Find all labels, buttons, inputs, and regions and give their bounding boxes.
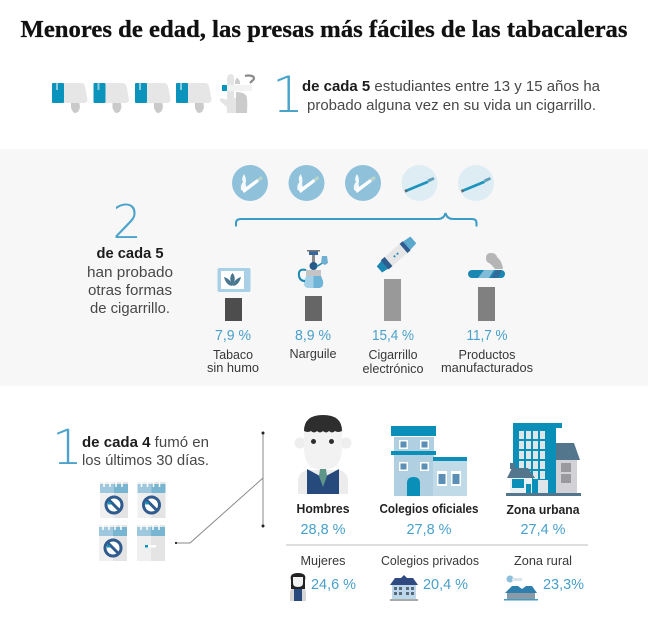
icon: e-cigarette [375, 235, 417, 274]
stat: 1 in 4: los últimos 30 días. [82, 452, 209, 469]
values and labels: Productos [458, 348, 516, 362]
values and labels: sin humo [207, 361, 259, 375]
icons: five circles, three cigarettes and two e-cigarettes [232, 165, 494, 201]
stat: 2 in 5: han probado [87, 264, 173, 281]
connector lines [175, 432, 264, 544]
pictogram: four calendars [99, 482, 166, 561]
bar: hookah [305, 296, 322, 321]
top row labels and values: Colegios oficiales [380, 502, 479, 516]
stat: 2 in 5: otras formas [88, 282, 172, 299]
stat: 1 in 5 students: 1 [272, 66, 304, 124]
values and labels: Cigarrillo [368, 348, 418, 362]
bottom row labels [300, 554, 572, 568]
icon: woman [290, 573, 306, 601]
values and labels: Tabaco [213, 348, 253, 362]
icon: manufactured products [468, 253, 505, 278]
pictogram: four no-smoking thumbs and one smoking hand [52, 74, 254, 113]
stat: 1 in 4: de cada 4 fumó en [82, 434, 209, 451]
values and labels: Narguile [290, 347, 337, 361]
bar: smokeless tobacco [225, 298, 242, 321]
icon: man [294, 415, 352, 494]
stat: 1 in 5 students: de cada 5 estudiantes entre 13 y 15 años ha [302, 78, 601, 95]
stat: 2 in 5 [87, 195, 173, 317]
stat: 2 in 5: de cigarrillo. [90, 300, 170, 317]
top row labels and values: 28,8 % [300, 521, 346, 538]
value: private schools: 20,4 % [423, 576, 468, 593]
stat: 2 in 5: de cada 5 [96, 245, 164, 262]
stat: 1 in 4: 1 [52, 420, 83, 476]
icon: private school [390, 575, 418, 601]
divider [286, 544, 588, 546]
values and labels: 11,7 % [466, 327, 508, 344]
values and labels: electrónico [362, 362, 424, 376]
icon: hookah [299, 250, 328, 288]
stat: 1 in 5 students: probado alguna vez en su vida un cigarrillo. [307, 97, 596, 114]
values and labels: 8,9 % [295, 327, 331, 344]
bottom row labels: Colegios privados [381, 554, 479, 568]
bottom row labels: Mujeres [300, 554, 346, 568]
top row labels and values: Zona urbana [506, 503, 581, 517]
values and labels: 15,4 % [372, 327, 414, 344]
title: Menores de edad, las presas más fáciles de las tabacaleras [20, 17, 628, 43]
panel: other forms of cigarette [0, 149, 648, 386]
bar: e-cigarette [384, 279, 401, 321]
bottom row labels: Zona rural [514, 554, 572, 568]
stat: 1 in 4 [52, 420, 209, 476]
stat: 2 in 5: 2 [112, 195, 142, 249]
icon: smokeless tobacco [218, 268, 250, 292]
icon: rural zone [504, 576, 538, 600]
top row labels and values: 27,8 % [406, 521, 452, 538]
value: rural zone: 23,3% [543, 576, 584, 593]
values and labels [207, 327, 533, 376]
icon: urban zone [506, 423, 581, 496]
value: women: 24,6 % [311, 576, 356, 593]
icon: public school [391, 426, 467, 496]
top row labels and values: Hombres [296, 502, 350, 516]
values and labels: manufacturados [441, 361, 533, 375]
brace [236, 213, 476, 226]
bar: manufactured products [478, 287, 495, 321]
top row labels and values [296, 502, 581, 538]
top row labels and values: 27,4 % [520, 521, 566, 538]
stat: 1 in 5 students [272, 66, 601, 124]
values and labels: 7,9 % [215, 327, 251, 344]
